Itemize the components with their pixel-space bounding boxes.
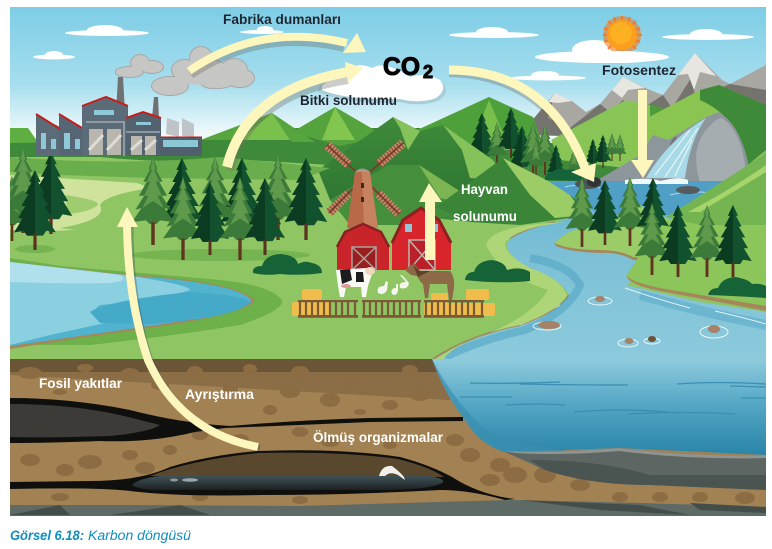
label: Ayrıştırma: Ayrıştırma (185, 387, 255, 402)
factory (36, 77, 202, 156)
river rocks (533, 296, 728, 347)
bushes (253, 254, 766, 298)
label: solunumu: solunumu (453, 209, 517, 224)
label: Fabrika dumanları: Fabrika dumanları (223, 12, 341, 27)
red barn left (337, 224, 389, 270)
left fossil fuel pocket (10, 398, 463, 443)
factory smoke (116, 47, 254, 95)
arrow: CO2 to forest (449, 70, 596, 182)
left forest trees (10, 149, 72, 253)
mid green hills (318, 117, 590, 225)
horse (405, 263, 454, 300)
back green hills (202, 85, 766, 168)
pond at waterfall (548, 178, 725, 215)
arrow: photosynthesis (631, 90, 654, 178)
hay bales (292, 289, 495, 316)
grey mountains (520, 53, 766, 140)
dark hedge band behind factory (10, 140, 330, 165)
meadow path (10, 175, 150, 231)
fence (298, 300, 484, 318)
arrow: animal respiration (419, 183, 442, 260)
cloud behind CO2 (318, 65, 446, 104)
forest behind the lake (468, 108, 626, 180)
red barn right (392, 208, 451, 270)
horizon hedge backdrop (238, 128, 620, 222)
underground soil (10, 359, 766, 516)
label: Fosil yakıtlar: Fosil yakıtlar (39, 376, 123, 391)
right bank (626, 150, 766, 311)
white clouds (33, 25, 754, 80)
island trees (565, 177, 752, 277)
bedrock (10, 500, 766, 516)
label: Fotosentez: Fotosentez (602, 63, 676, 78)
island (554, 205, 670, 262)
label: Bitki solunumu: Bitki solunumu (300, 93, 397, 108)
caption (10, 528, 191, 543)
cows (336, 267, 375, 297)
distant factory hill (10, 128, 36, 143)
fossil bird remains (379, 466, 405, 480)
waterfall rock (596, 112, 750, 182)
caption: Karbon döngüsü (88, 528, 191, 543)
pond rocks (575, 177, 700, 194)
arrow: decomposition upward (117, 207, 260, 448)
label: CO2: 2 (423, 62, 433, 82)
label: CO2: CO (383, 53, 420, 81)
arrow: factory smoke to CO2 (189, 33, 366, 75)
icon: sun (603, 16, 644, 63)
sky (10, 7, 766, 147)
caption: Görsel 6.18: (10, 528, 84, 543)
arrow: plant respiration to CO2 (227, 62, 363, 170)
ocean (432, 359, 766, 455)
central forest trees (130, 155, 327, 261)
ground (10, 153, 766, 359)
label: Ölmüş organizmalar: Ölmüş organizmalar (313, 430, 444, 445)
lower fossil fuel layer (10, 450, 515, 500)
lake left (10, 258, 282, 358)
seabed layers (503, 448, 766, 490)
label: Hayvan: Hayvan (461, 182, 508, 197)
river details (433, 222, 766, 359)
light riverbank meadow (436, 222, 567, 359)
river (435, 208, 766, 359)
geese (378, 275, 409, 295)
pond bush (545, 169, 585, 181)
windmill (327, 143, 403, 228)
